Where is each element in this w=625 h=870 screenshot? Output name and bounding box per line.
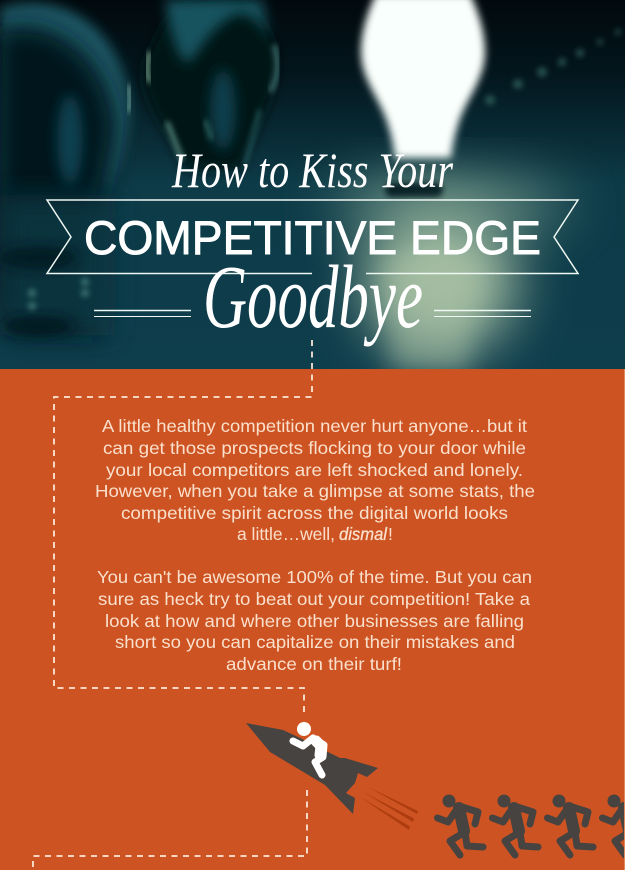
icon: row of running competitors <box>438 794 625 855</box>
title: How to Kiss Your: How to Kiss Your <box>171 142 453 198</box>
rocket body <box>246 723 378 814</box>
left double rule <box>94 310 191 316</box>
intro paragraph two: You can't be awesome 100% of the time. But you can <box>97 567 532 587</box>
intro paragraph one: can get those prospects flocking to your door while <box>103 438 526 458</box>
intro paragraph one: your local competitors are left shocked and lonely. <box>106 460 523 480</box>
rider <box>293 722 324 775</box>
intro paragraph two <box>97 567 532 674</box>
intro paragraph one: a little…well, <box>237 524 335 544</box>
intro paragraph one: competitive spirit across the digital world looks <box>121 503 508 523</box>
right double rule <box>434 310 531 316</box>
intro paragraph one: A little healthy competition never hurt anyone…but it <box>102 416 527 436</box>
intro paragraph two: advance on their turf! <box>226 654 402 674</box>
dashed path: rocket to next section <box>33 790 307 870</box>
intro paragraph one <box>95 416 535 544</box>
intro paragraph one: However, when you take a glimpse at some stats, the <box>95 481 535 501</box>
intro paragraph two: look at how and where other businesses are falling <box>105 611 524 631</box>
intro paragraph two: short so you can capitalize on their mistakes and <box>115 632 515 652</box>
dashed path: title to intro <box>54 340 312 712</box>
title: Goodbye: Goodbye <box>203 248 423 347</box>
rocket exhaust <box>360 787 418 830</box>
intro paragraph two: sure as heck try to beat out your competition! Take a <box>98 589 530 609</box>
icon: rocket with rider <box>246 722 418 830</box>
title: Competitive Edge: COMPETITIVE EDGE <box>84 211 541 264</box>
hero photo: light bulbs <box>0 0 625 370</box>
banner ribbon outline <box>47 200 578 274</box>
orange content panel <box>0 369 625 870</box>
intro paragraph one: dismal <box>339 524 388 544</box>
intro paragraph one: ! <box>388 524 393 544</box>
